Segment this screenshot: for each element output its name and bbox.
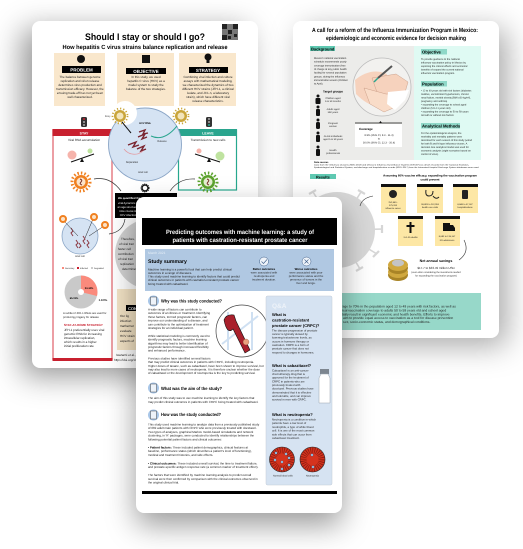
panel: background: Target groups [323,90,343,94]
text: why body: improve our understanding of a disease, and [148,319,208,323]
panel: background: schedule recommends yearly [314,61,347,64]
panel: background: 6 to 59 months [325,100,342,103]
panel: objective, population, methods [414,46,481,160]
heading: CRPC [272,312,320,328]
panel: study summary: presence of tumors in the [290,278,322,282]
panel: conclusions [310,293,481,330]
panel: influenza poster card [293,21,499,338]
coverage box: to [378,138,381,140]
panel: problem: PROBLEM [70,68,93,72]
results label: Results [316,176,330,180]
panel: conclusion: Our lig [120,314,129,318]
text: aim body [148,396,259,404]
panel: study summary: March 2021 [148,251,166,255]
data sources: Epidemiological and Statistical System, and discharge and hospitalization records (2010–2017) from the Automated Hospital Discharge System databases were used. [314,166,480,169]
grey result circle: faster cell [118,247,131,251]
panel: objective, population, methods: mellitus, uncontrolled hypertension, chronic [421,93,470,96]
text: how body: clustering, in 'R' packages, were conducted to identify relationships between the [148,434,254,438]
heading: cabazitaxel: What is cabazitaxel? [272,363,312,368]
grey result circle: of viral tran [118,257,133,261]
panel: problem [54,53,105,106]
text: cabazitaxel: chemotherapy drug that is [272,372,305,376]
text: why body: A wide range of factors can contribute to [148,308,202,312]
panel: objective, population, methods: control of virus). [421,153,439,156]
panel: conclusion [117,289,177,350]
text: aim body: The aim of this study was to use machine learning to identify the key factors that [148,396,255,400]
panel: objective, population, methods: old with or without risk factors [421,114,455,117]
target group icons [316,94,320,156]
text: how body: The factors that were identified by machine learning analysis to predict overall [148,473,252,477]
panel: objective, population, methods: benefits of expand the current national [421,68,464,72]
panel: strategy: we characterized the dynamics of two [183,83,234,87]
panel: study summary: neutropenia and [254,274,275,278]
yellow stat cards: health care visits [422,206,439,209]
yellow stat cards: 375,283 [389,204,398,207]
text: why body: may also lead to more cases of neutropenia. It is therefore unclear whether the dose [148,368,260,372]
panel: conclusion: mathemat [120,324,134,328]
text: neutropenia: cell. It is one of the most common [272,429,315,433]
net savings: (even after considering the investment needed [411,271,461,274]
text: neutropenia: neutrophils, a type of white blood [272,425,314,429]
text: why body: Previous studies have identified several factors [148,356,211,360]
panel: background: coverage immunization (free [314,64,346,67]
text: CRPC: castration. CRPC is a form of [272,343,309,347]
icon: orange virus [72,173,90,191]
text: CRPC: occurs in hormone therapy or [272,339,309,343]
panel: background: ≥60 years [328,111,339,114]
title banner: Predicting outcomes with machine learning: a study of [166,229,315,236]
icon: traffic light leave [206,117,212,127]
icon: better outcomes [260,257,268,266]
panel: Q&A: Neutropenia [306,474,320,478]
panel: background: Children aged [326,97,341,100]
panel: objective, population, methods: To provide guidance to the national [421,58,460,61]
panel: stay: STAY-AT-HOME STRATEGY [64,323,103,327]
panel: objective: In this study, we used [131,75,161,79]
panel: study summary: clinical outcomes in patients with castration-resistant prostate cancer [148,278,239,282]
data sources: Data from the Influenza seasons 2005–2018 and Mexico's Influenza Surveillance System (SISVEFLU); death records from the National Statistics, [314,164,470,166]
yellow stat cards: ER admissions [440,239,455,242]
panel: background: immunization season (October [314,79,348,82]
icon: gold virus entering [105,108,131,133]
panel: study summary: treatment duration. [252,278,276,282]
panel: background: facility) for several population [314,72,347,75]
panel: objective, population, methods: • expanding the coverage to 50 to 59 years [421,110,469,114]
text: why body: these factors, termed prognostic factors, can [148,315,208,319]
text: how body: Two types of analyses, graphical Markov model-based simulations and network [148,430,254,434]
results heading: could prevent [421,178,440,182]
grey result circle: Therefore, a [121,237,138,241]
panel: strategy: different HCV strains (JFH-1, a clinical [182,87,234,91]
panel: strategy: Combining viral infection and culture [183,75,233,79]
net savings: Net annual savings [420,259,452,263]
title banner: patients with castration-resistant prostate cancer [172,237,308,244]
panel: strategy: release characteristics. [192,99,224,103]
heading: CRPC: What is [272,312,287,317]
text: CRPC [272,328,318,354]
grey result circle: of viral tran [119,242,134,246]
yellow stat cards: 252,853– [388,201,398,204]
panel: background: groups, during the influenza [314,75,345,78]
text: cabazitaxel: Cabazitaxel is an anti-cancer [272,368,309,372]
title: epidemiologic and economic evidence for decision making [326,35,466,42]
text: how body: baseline, performance status (which describes a patient's level of functioning), [148,449,252,453]
legend: Infected [80,267,89,270]
text: neutropenia: side effects that can occur from [272,432,312,436]
panel: Q&A: Normal blood cells [273,474,294,478]
panel: objective: model system to study the [128,83,164,87]
icon: document aim [148,382,159,394]
panel: stay: genomic RNA for increasing [64,332,102,336]
text: cabazitaxel: CRPC in patients who are [272,379,305,383]
diagram: host cell: HCV RNA [139,122,151,125]
net savings: $17.7 to $33.49 million USD [417,266,456,270]
diagram: host cell [108,101,182,181]
yellow stat cards: hospitalizations [458,206,473,209]
panel: objective, population, methods: described for each season of this study period [421,139,473,142]
panel: problem: determines virus production and [58,83,102,87]
heading: how: How was the study conducted? [161,412,221,417]
coverage box [355,121,402,147]
panel: background [310,46,414,160]
text: why body: Higher doses of taxane, such as cabazitaxel, have been shown to improve survival, but [148,364,264,368]
panel: study summary: outcomes in a range of diseases. [148,271,192,275]
panel: objective, population, methods: • expanding the coverage to school aged [421,104,467,106]
diagram: host cell: Host cell [138,171,148,174]
icon: gear [141,184,149,192]
panel: objective, population, methods: • 12 to 49 years old with risk factors (diabetes [421,90,472,92]
heading: CRPC: prostate cancer (CRPC)? [272,323,320,328]
panel: conclusion: CONCLUSION [128,306,155,311]
panel: stay: Viral RNA accumulation [68,138,100,142]
text: why body: can contribute to the optimization of treatment [148,322,209,326]
arrows [360,196,466,260]
panel: objective, population, methods: decision-tree analytical model was used for [421,146,469,149]
panel: background: Health [330,149,337,152]
text: cabazitaxel: demonstrated that it is effective [272,390,312,394]
panel: prostate cancer poster card [136,197,342,513]
results heading [383,174,477,182]
text: how body: • Patient factors: These included patient demographics, clinical features at [148,446,248,450]
panel: objective, population, methods: renal failure, morbid obesity [BMI ≥30 kg/m²], [421,96,471,100]
yellow stat cards: 114–35 deaths [403,236,419,239]
callout: black box: HCV infection [120,214,137,217]
panel: study summary: were associated with [251,270,278,274]
panel: background: Adults aged [327,108,340,111]
panel: study summary: performance status and the [289,274,324,278]
panel: objective, population, methods: morbidity and mortality patterns were [421,136,463,138]
text: CRPC: The disease progression of prostate [272,328,318,332]
diagram: host cell: Replication [126,161,139,164]
net savings [411,259,461,278]
text: cabazitaxel: approved for the treatment of [272,376,309,380]
panel: study summary: Machine learning is a powerful tool that can help predict clinical [148,268,232,272]
callout: black box: viral dynamics of [118,202,138,205]
panel: objective, population, methods: Objective [422,50,442,54]
icon: neutropenia cells [300,447,325,472]
panel: leave [178,129,237,191]
text: how body: This study used machine learning to analyze data from a previously published study [148,422,260,426]
grey result circle: determines [122,267,138,271]
panel: stay: A subtle of JFH-1 RNAs are used for [63,312,107,315]
panel: conclusions: expanding the universal vaccination coverage to adults 50 to 59 years old and school aged [312,308,446,312]
panel: study summary: Better outcomes [253,267,276,271]
panel: objective, population, methods: pregnancy and asthma) [421,100,447,103]
text: aim body: may predict clinical outcomes in patients with CRPC being treated with cabazitaxel. [148,400,259,404]
panel: background: aged 5 to 59 years [323,138,344,141]
panel: stay: intracellular replication, [64,336,95,340]
panel: strategy: strain), which have different viral [186,95,230,99]
panel: strategy [179,53,236,106]
panel: objective [117,53,174,106]
panel: problem: transmission efficacy. However, the [56,87,104,91]
pie chart: 65.19% [70,297,79,300]
panel: stay: which results in a higher [64,340,97,344]
yellow stat cards: 8,689 to 47,187 [457,203,473,206]
callout: black box: We quantified the [118,197,141,200]
panel: objective, population, methods: influenza vaccination program. [421,72,455,75]
coverage box: Coverage [359,127,373,131]
grey result circle [115,219,185,289]
panel: stay: STAY [80,132,89,136]
net savings: for expanding the vaccination program) [415,274,457,278]
icon: traffic light stay [81,117,87,127]
text: CRPC: lowering testosterone levels, as [272,336,312,340]
text: why body: algorithms may lead to better identification of [148,341,208,345]
text: cabazitaxel: previously treated with [272,383,301,387]
results heading: Assuming 60% vaccine efficacy, expanding the vaccination program [383,174,477,178]
footer bar [142,491,337,494]
citation: https://doi.org/10 [114,358,137,362]
panel: stay: JFH-1 preferentially uses viral [64,328,105,332]
panel: background: Background [311,46,335,52]
grey result circle: contribution [118,252,134,256]
panel: objective, population, methods: children (5 to 11 years old) [421,107,451,110]
text: how body: and prostate-specific antigen response rate (a common marker of treatment effect). [148,465,258,469]
text: how body: the original clinical trial. [148,480,179,484]
panel: study summary: were associated with poor [290,270,322,274]
panel: study summary: liver and lungs. [296,281,316,285]
text: neutropenia: Neutropenia is a condition in which [272,418,316,422]
panel: study summary: being treated with cabazitaxel. [148,282,189,286]
text: how body [148,422,260,484]
panel: problem: The balance between genome [60,75,101,79]
text: why body: and enhanced performance. [148,349,186,353]
panel: study summary [145,249,334,291]
title banner [142,218,337,245]
panel: conclusions: children could potentially result in significant economic and health benefits. Efforts to improve [312,312,450,316]
grey result circle: replication [120,262,134,266]
panel: conclusions: Expanding the coverage to 70% in the population aged 12 to 49 years with risk factors, as well as [312,304,456,308]
text: how body: following potential patient factors and clinical outcomes: [148,438,222,442]
panel: conclusion: evaluate [120,329,132,333]
text: why body: outcomes of an illness or treatment. Identifying [148,311,210,315]
coverage box: 8.9% (95% CI, 8.3 - 11.3) [364,134,394,137]
panel: objective: hepatitis C virus (HCV) as a [127,79,165,83]
citation [114,353,137,362]
panel: conclusions: Conclusions [312,298,337,303]
results label [310,174,336,180]
panel: background: Mexico's national vaccination [314,57,347,60]
panel: objective, population, methods: exploring the clinical effects and economic [421,65,469,68]
panel: conclusion: infection [120,319,132,323]
legend: Secretory [65,267,75,270]
yellow stat cards: influenza cases [385,207,401,210]
heading: why: Why was this study conducted? [161,298,222,304]
pie chart: 34.44% [85,287,94,290]
panel: objective: OBJECTIVE [133,69,159,74]
panel: problem: replication and virion release [61,79,100,83]
panel: conclusion: aspects of [120,339,134,343]
text: why body: of cabazitaxel or the development of neutropenia is the key to predicting survival. [148,371,256,375]
coverage box: 30.0% (95% CI, 22.3 - 35.4) [363,142,395,144]
panel: objective, population, methods: For the epidemiological analysis, the [421,132,462,135]
panel: strategy: isolate, and JC1-n, a laboratory [187,91,230,95]
text: CRPC: respond to changes in hormones. [272,350,314,354]
panel: stay [52,129,112,361]
text: why body [148,308,264,375]
pie chart: 0.037% [99,299,108,302]
icon: vial [319,369,330,403]
yellow stat cards: 38,803 to 242,053 [421,203,440,206]
panel: background: of charge at any public health [314,68,347,71]
legend [62,267,104,270]
icon: document why [148,296,159,306]
heading: neutropenia: What is neutropenia? [272,412,313,417]
panel: background: Pregnant [328,122,338,125]
diagram: host cell: Release [157,140,167,143]
icon: coins [388,259,408,281]
text: neutropenia: cabazitaxel treatment. [272,436,300,440]
grey virus [299,190,383,271]
text: how body: survival were then confirmed by comparison with the clinical outcomes observed in [148,477,258,481]
text: how body: of 669 adult male patients with CRPC who were previously treated with docetaxel. [148,426,257,430]
panel: objective: balance of the two strategies. [126,87,166,91]
panel: leave: LEAVE [202,132,214,136]
icon: gold virus released [174,108,188,124]
panel: conclusions: vaccination program aim to provide equal access to vaccination as a tool for disease prevention [312,316,453,320]
text: why body: identify prognostic factors, machine learning [148,338,207,342]
text: how body: medical and treatment histories, and side effects. [148,453,213,457]
text: why body: strategies for an individual patient. [148,326,194,330]
text: CRPC: cancer is typically slowed by [272,332,308,336]
panel: hepatitis C poster card [32,21,258,368]
illustration: prostate anatomy [216,305,268,357]
callout: black box: time course of [120,210,137,213]
heading: CRPC: castration-resistant [272,318,310,322]
panel: strategy: STRATEGY [196,68,220,73]
text: why body: that may predict clinical outcomes in patients with CRPC, including neutropenia. [148,360,254,364]
panel: study summary: This study used machine learning to identify factors that could predict [148,274,240,278]
panel: objective, population, methods: economic analysis (eight scenarios based on [421,150,471,152]
icon: green virus [199,173,217,191]
icon: gold virus entering: Entry [105,115,111,118]
panel: strategy: assays with mathematical modeling, [184,79,233,83]
panel: background: professionals [326,152,341,155]
panel: objective, population, methods: Population [422,82,444,86]
panel: problem: ensuing trade-off has not yet been [57,91,103,95]
arrows to black box [94,178,195,234]
panel: stay: Host cell [75,255,85,258]
panel: conclusions: without limitations of sex, socio-economic status, and demographical conditions. [312,320,430,324]
text: neutropenia: patients have a low level of [272,421,306,425]
text: cabazitaxel: survival in men with CRPC. [272,398,307,402]
panel: Q&A [266,296,332,485]
panel: objective, population, methods: Analytical Methods [422,124,461,128]
pie chart [64,276,108,308]
panel: study summary: Study summary [148,259,187,265]
text: cabazitaxel: docetaxel. Previous studies have [272,387,314,391]
title [312,27,478,42]
panel: objective, population, methods: influenza vaccination policy in Mexico by [421,62,467,64]
text: cabazitaxel: and tolerable, and can improve [272,394,311,398]
citation: Iwanami et al., [116,353,136,357]
panel: background: to April). [314,82,323,86]
panel: stay: producing progeny for release [63,316,99,319]
yellow stat cards [381,184,478,246]
icon: QR code [222,24,238,40]
data sources: Data sources [314,161,329,164]
callout: black box [115,193,177,218]
subtitle: How hepatitis C virus strains balance replication and release [62,44,228,51]
callout: black box: an age structured [118,206,139,209]
title: Should I stay or should I go? [85,32,205,43]
icon: worse outcomes [302,257,311,266]
yellow stat cards: 8,693 to 135,167 [439,235,456,238]
icon: document how [148,410,159,420]
panel: problem: well characterized. [67,95,93,99]
text: how body: • Clinical outcomes: These included overall survival, the time to treatment failure, [148,462,258,466]
data sources [314,161,480,169]
text: cabazitaxel [272,368,314,402]
panel: Q&A: Q&A [272,303,287,310]
panel: conclusion: HCV strain [120,334,135,338]
icon: infected cell with virions [60,214,108,254]
legend: Degraded [94,267,104,270]
illustration: vaccination [353,58,411,116]
panel: study summary: Worse outcomes [295,267,318,271]
text: why body: prognostic factors through increased flexibility [148,345,209,349]
panel: objective, population, methods: for both B and M type Influenza viruses. A [421,142,468,146]
heading: aim: What was the aim of the study? [161,386,222,391]
panel: background: At-risk individuals [324,135,343,138]
text: neutropenia [272,418,316,440]
icon: normal blood cells [270,447,294,472]
panel: background: women [329,125,338,128]
text: CRPC: prostate cancer that does not [272,347,309,351]
text: why body: While statistical modeling is commonly used to [148,334,210,338]
panel: stay: initial proliferation rate [64,344,94,348]
panel: leave: Transmission to new cells [191,138,226,142]
